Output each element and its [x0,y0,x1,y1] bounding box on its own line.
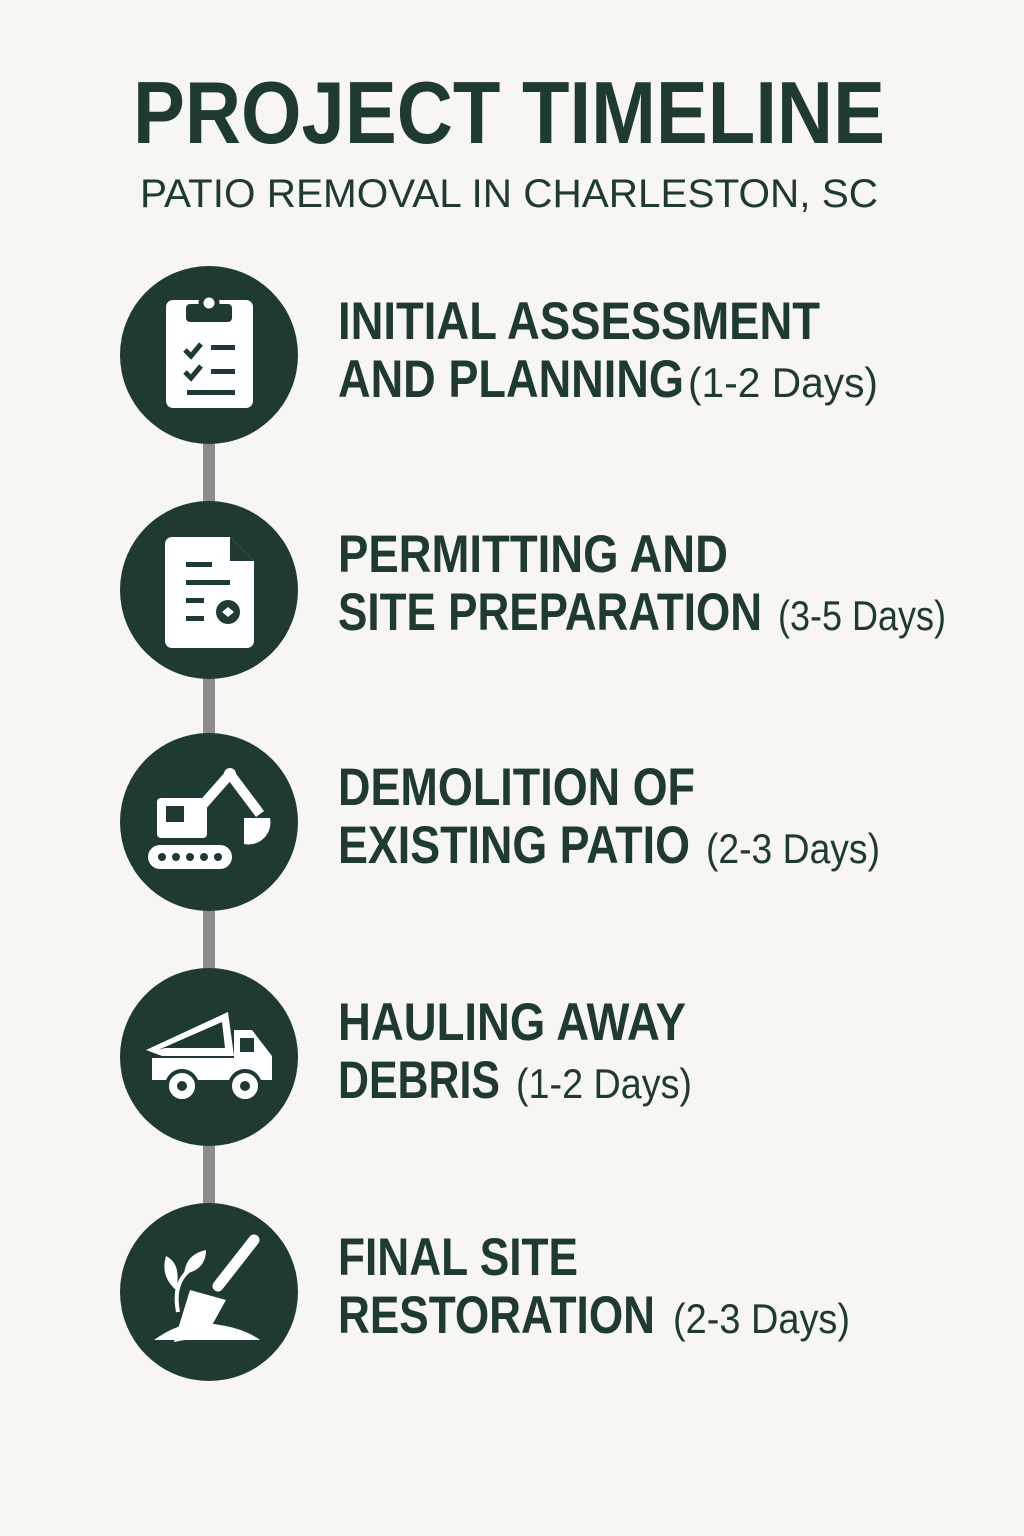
subtitle: PATIO REMOVAL IN CHARLESTON, SC [140,172,878,216]
step text 3: (2-3 Days) [706,825,880,872]
step text 2 [338,525,946,642]
step text 1 [338,292,878,409]
step text 3: EXISTING PATIO [338,816,690,875]
icon: clipboard [120,266,298,444]
step text 2: (3-5 Days) [778,592,946,639]
step text 1: (1-2 Days) [688,359,878,406]
step text 4: HAULING AWAY [338,993,686,1052]
step text 2: PERMITTING AND [338,525,728,584]
step text 1: INITIAL ASSESSMENT [338,292,820,351]
step text 2: SITE PREPARATION [338,583,762,642]
step 4 [120,968,692,1146]
step text 4 [338,993,692,1110]
step 5 [120,1203,850,1381]
icon: document [120,501,298,679]
step text 4: (1-2 Days) [516,1060,692,1107]
step text 5: RESTORATION [338,1286,655,1345]
step 3 [120,733,880,911]
title: PROJECT TIMELINE [133,63,885,162]
step text 3: DEMOLITION OF [338,758,695,817]
step text 1: AND PLANNING [338,350,684,409]
step text 4: DEBRIS [338,1051,500,1110]
icon: trowel and sprout [120,1203,298,1381]
icon: dump truck [120,968,298,1146]
step text 5: (2-3 Days) [673,1295,850,1342]
connector line [203,440,215,1300]
step 1 [120,266,878,444]
step text 3 [338,758,880,875]
icon: excavator [120,733,298,911]
step text 5: FINAL SITE [338,1228,578,1287]
step text 5 [338,1228,850,1345]
step 2 [120,501,946,679]
